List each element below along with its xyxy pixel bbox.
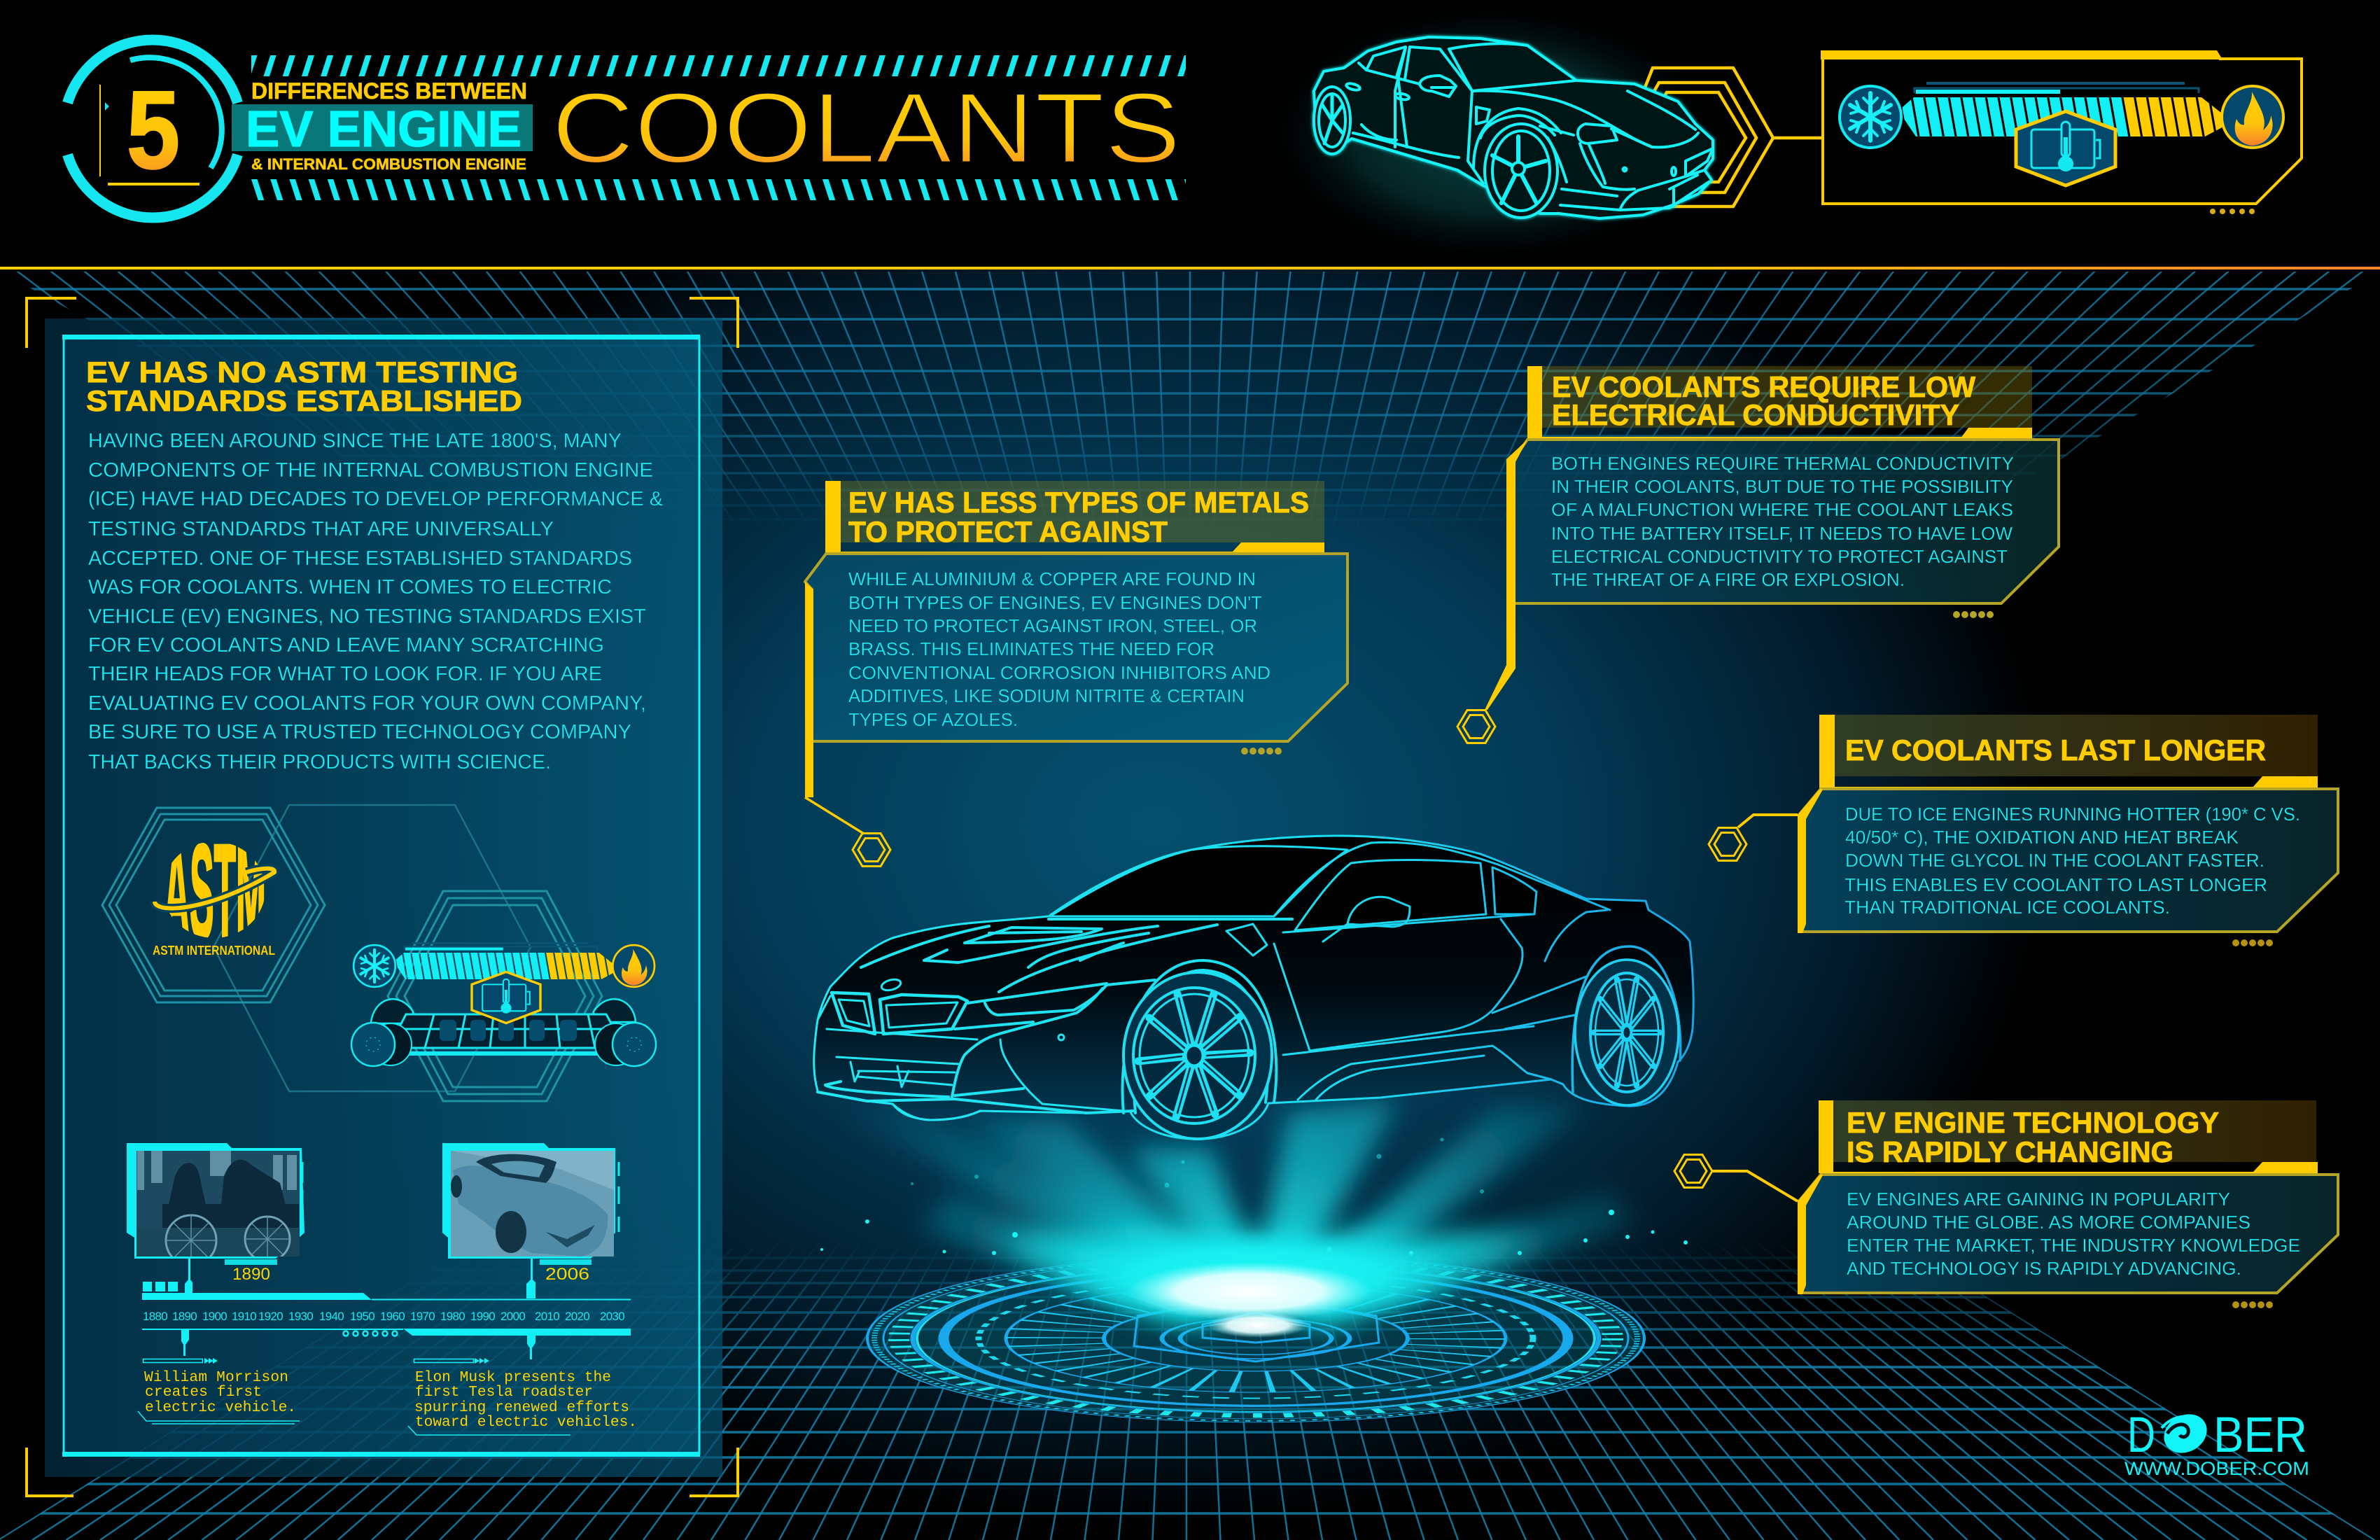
- body box: [1514, 440, 2059, 603]
- panel body text: THAT BACKS THEIR PRODUCTS WITH SCIENCE.: [88, 751, 551, 774]
- body frame and connector: [1798, 1174, 1823, 1294]
- caption: Elon Musk: [408, 1358, 637, 1435]
- main car illustration: [814, 836, 1693, 1139]
- caption: William Morrison: creates first: [145, 1384, 262, 1401]
- year label 1890: 1890: [232, 1265, 270, 1284]
- timeline years: 1910: [232, 1310, 256, 1323]
- temperature bar: [1840, 82, 2283, 148]
- hologram platform: [867, 1254, 1644, 1422]
- timeline years: 1970: [410, 1310, 435, 1323]
- chassis hexagon frame: [388, 891, 602, 1101]
- ASTM logo: [150, 843, 279, 955]
- header: IS RAPIDLY CHANGING: [1847, 1135, 2174, 1168]
- header: EV COOLANTS REQUIRE LOW: [1552, 370, 1975, 403]
- header: [1527, 366, 2032, 440]
- photo frame 1890: [127, 1143, 304, 1266]
- nested yellow hexagons: [1638, 68, 1821, 206]
- title line: differences between: DIFFERENCES BETWEEN: [251, 78, 527, 104]
- header: [1819, 715, 2318, 790]
- caption: Elon Musk: spurring renewed efforts: [414, 1399, 629, 1416]
- title stripes top: [251, 55, 1186, 76]
- panel frame: [1823, 59, 2302, 204]
- body text: THIS ENABLES EV COOLANT TO LAST LONGER: [1844, 876, 2267, 895]
- body text: BRASS. THIS ELIMINATES THE NEED FOR: [848, 640, 1214, 659]
- panel heading: EV HAS NO ASTM TESTING: [86, 356, 518, 388]
- timeline years: 1930: [288, 1310, 313, 1323]
- body frame and connector: [805, 554, 826, 797]
- body text: THE THREAT OF A FIRE OR EXPLOSION.: [1551, 570, 1905, 590]
- logo swirl: [2157, 1406, 2214, 1461]
- body text: [1551, 454, 2014, 590]
- title word: coolants: COOLANTS: [552, 73, 1181, 184]
- top right thermometer panel: [1821, 50, 2302, 214]
- caption: William Morrison: electric vehicle.: [145, 1399, 296, 1416]
- body text: TYPES OF AZOLES.: [848, 710, 1018, 730]
- body text: IN THEIR COOLANTS, BUT DUE TO THE POSSIBILITY: [1551, 477, 2013, 497]
- body text: NEED TO PROTECT AGAINST IRON, STEEL, OR: [848, 617, 1257, 636]
- header: EV COOLANTS LAST LONGER: [1845, 734, 2266, 766]
- header: TO PROTECT AGAINST: [848, 515, 1168, 548]
- mini thermometer badge: [472, 972, 540, 1023]
- timeline years: 2030: [600, 1310, 624, 1323]
- body text: AROUND THE GLOBE. AS MORE COMPANIES: [1847, 1213, 2250, 1233]
- top right car illustration: [1260, 0, 1821, 266]
- front wheel: [1124, 972, 1272, 1139]
- panel heading: STANDARDS ESTABLISHED: [86, 384, 522, 417]
- body text: OF A MALFUNCTION WHERE THE COOLANT LEAKS: [1551, 500, 2013, 520]
- logo wordmark: D: [2127, 1408, 2155, 1463]
- callout: technology rapidly changing: [1674, 1100, 2338, 1308]
- panel heading: [86, 356, 522, 417]
- dots: [2232, 1301, 2273, 1308]
- body text: CONVENTIONAL CORROSION INHIBITORS AND: [848, 664, 1270, 683]
- car body: [814, 836, 1693, 1139]
- callout: less types of metals: [805, 481, 1348, 867]
- panel body text: HAVING BEEN AROUND SINCE THE LATE 1800'S, MANY: [88, 430, 622, 452]
- body text: AND TECHNOLOGY IS RAPIDLY ADVANCING.: [1847, 1259, 2241, 1279]
- header: [825, 481, 1324, 554]
- body text: ADDITIVES, LIKE SODIUM NITRITE & CERTAIN: [848, 687, 1245, 706]
- ASTM hexagon frame: [102, 808, 325, 1002]
- body text: DUE TO ICE ENGINES RUNNING HOTTER (190* C VS.: [1845, 805, 2300, 825]
- panel body text: BE SURE TO USE A TRUSTED TECHNOLOGY COMPANY: [88, 721, 631, 743]
- logo wordmark: [2127, 1408, 2307, 1463]
- rear wheel: [1575, 960, 1679, 1105]
- timeline: [142, 1259, 631, 1359]
- panel dots: [2210, 209, 2255, 214]
- ASTM logo: ASTM INTERNATIONAL: [153, 943, 275, 958]
- panel: ASTM standards: [27, 298, 738, 1496]
- mini temperature bar: [354, 942, 654, 987]
- corner brackets: [27, 298, 738, 1496]
- logo url: WWW.DOBER.COM: [2124, 1458, 2309, 1479]
- small car outline: [1314, 37, 1713, 218]
- connector hexagon: [1457, 710, 1495, 743]
- timeline years: 1950: [350, 1310, 374, 1323]
- timeline years: 1880: [143, 1310, 167, 1323]
- EV engine label: EV ENGINE: [246, 102, 522, 158]
- callout: coolants last longer: [1709, 715, 2338, 946]
- connector hexagon: [853, 833, 890, 867]
- header: EV HAS LESS TYPES OF METALS: [848, 486, 1309, 519]
- caption: William Morrison: William Morrison: [144, 1369, 288, 1386]
- body box: [1799, 1175, 2338, 1293]
- body box: [1799, 789, 2338, 932]
- panel body text: THEIR HEADS FOR WHAT TO LOOK FOR. IF YOU ARE: [88, 663, 602, 685]
- hologram core glow: [994, 1228, 1540, 1338]
- caption: Elon Musk: first Tesla roadster: [415, 1384, 593, 1401]
- number badge circle: [67, 40, 238, 218]
- timeline years: 1940: [319, 1310, 344, 1323]
- logo wordmark: BER: [2213, 1408, 2307, 1463]
- caption: William Morrison: [138, 1358, 300, 1424]
- header background: [0, 0, 2380, 270]
- title stripes bottom: [251, 179, 1186, 200]
- connector hexagon: [1709, 827, 1746, 861]
- timeline years: 1890: [172, 1310, 197, 1323]
- body text: BOTH ENGINES REQUIRE THERMAL CONDUCTIVITY: [1551, 454, 2014, 474]
- title block: [67, 40, 1186, 218]
- caption: Elon Musk: toward electric vehicles.: [415, 1414, 637, 1431]
- dots: [1241, 748, 1282, 755]
- floating particles: [820, 1138, 1688, 1255]
- header: [1819, 1100, 2318, 1175]
- body text: ENTER THE MARKET, THE INDUSTRY KNOWLEDGE: [1847, 1236, 2300, 1256]
- caption: Elon Musk: Elon Musk presents the: [415, 1369, 611, 1386]
- connector hexagon: [1674, 1155, 1712, 1187]
- timeline years: 2010: [535, 1310, 559, 1323]
- panel body text: WAS FOR COOLANTS. WHEN IT COMES TO ELECTRIC: [88, 576, 612, 598]
- callout: low electrical conductivity: [1457, 366, 2059, 743]
- EV chassis illustration: [351, 999, 656, 1066]
- panel body text: ACCEPTED. ONE OF THESE ESTABLISHED STANDARDS: [88, 547, 632, 570]
- right wheel: [595, 1023, 656, 1066]
- title line: internal combustion engine: & INTERNAL COMBUSTION ENGINE: [251, 155, 526, 173]
- timeline years: 1960: [380, 1310, 405, 1323]
- body text: INTO THE BATTERY ITSELF, IT NEEDS TO HAVE LOW: [1551, 524, 2012, 544]
- panel backing: [45, 318, 722, 1477]
- dots: [2232, 939, 2273, 946]
- body text: WHILE ALUMINIUM & COPPER ARE FOUND IN: [848, 570, 1256, 589]
- car front detail lines: [818, 910, 1681, 1120]
- timeline years: 1990: [470, 1310, 495, 1323]
- body text: [848, 570, 1270, 730]
- timeline years: 1920: [258, 1310, 283, 1323]
- Dober logo: [2124, 1406, 2309, 1479]
- car windows: [1050, 842, 1610, 941]
- header: ELECTRICAL CONDUCTIVITY: [1552, 398, 1959, 431]
- timeline years: 2000: [500, 1310, 525, 1323]
- body text: ELECTRICAL CONDUCTIVITY TO PROTECT AGAINST: [1551, 547, 2008, 567]
- panel inner frame: [64, 337, 699, 1454]
- timeline years: 1900: [202, 1310, 227, 1323]
- panel body text: FOR EV COOLANTS AND LEAVE MANY SCRATCHING: [88, 634, 604, 657]
- body text: BOTH TYPES OF ENGINES, EV ENGINES DON'T: [848, 594, 1262, 613]
- timeline years: 1980: [440, 1310, 465, 1323]
- year label 2006: 2006: [545, 1265, 589, 1284]
- header divider line: [0, 267, 2380, 270]
- body text: [1847, 1190, 2300, 1279]
- left wheel: [351, 1023, 412, 1066]
- panel: ASTM standards: ASTM: [164, 816, 266, 967]
- thermometer badge: [2016, 111, 2115, 186]
- body box: [805, 554, 1348, 741]
- panel tab: [1821, 50, 2222, 59]
- timeline years: 2020: [565, 1310, 589, 1323]
- panel body text: EVALUATING EV COOLANTS FOR YOUR OWN COMPANY,: [88, 692, 646, 715]
- panel body text: TESTING STANDARDS THAT ARE UNIVERSALLY: [88, 518, 554, 540]
- body frame and connector: [1485, 440, 1527, 710]
- panel body text: VEHICLE (EV) ENGINES, NO TESTING STANDARDS EXIST: [88, 606, 646, 628]
- panel body text: [88, 430, 663, 774]
- faint background hexagon: [214, 805, 531, 1091]
- number 5: 5: [127, 69, 180, 192]
- panel body text: COMPONENTS OF THE INTERNAL COMBUSTION ENGINE: [88, 459, 653, 482]
- hologram light beams: [833, 1099, 1638, 1326]
- header: EV ENGINE TECHNOLOGY: [1847, 1106, 2219, 1139]
- body text: EV ENGINES ARE GAINING IN POPULARITY: [1847, 1190, 2230, 1210]
- body text: DOWN THE GLYCOL IN THE COOLANT FASTER.: [1845, 851, 2264, 871]
- panel body text: (ICE) HAVE HAD DECADES TO DEVELOP PERFORMANCE &: [88, 488, 663, 510]
- photo frame 2006: [442, 1143, 619, 1265]
- body text: 40/50* C), THE OXIDATION AND HEAT BREAK: [1845, 828, 2239, 848]
- body text: [1844, 805, 2300, 918]
- body frame and connector: [1798, 788, 1823, 933]
- dots: [1953, 611, 1994, 618]
- body text: THAN TRADITIONAL ICE COOLANTS.: [1844, 898, 2170, 918]
